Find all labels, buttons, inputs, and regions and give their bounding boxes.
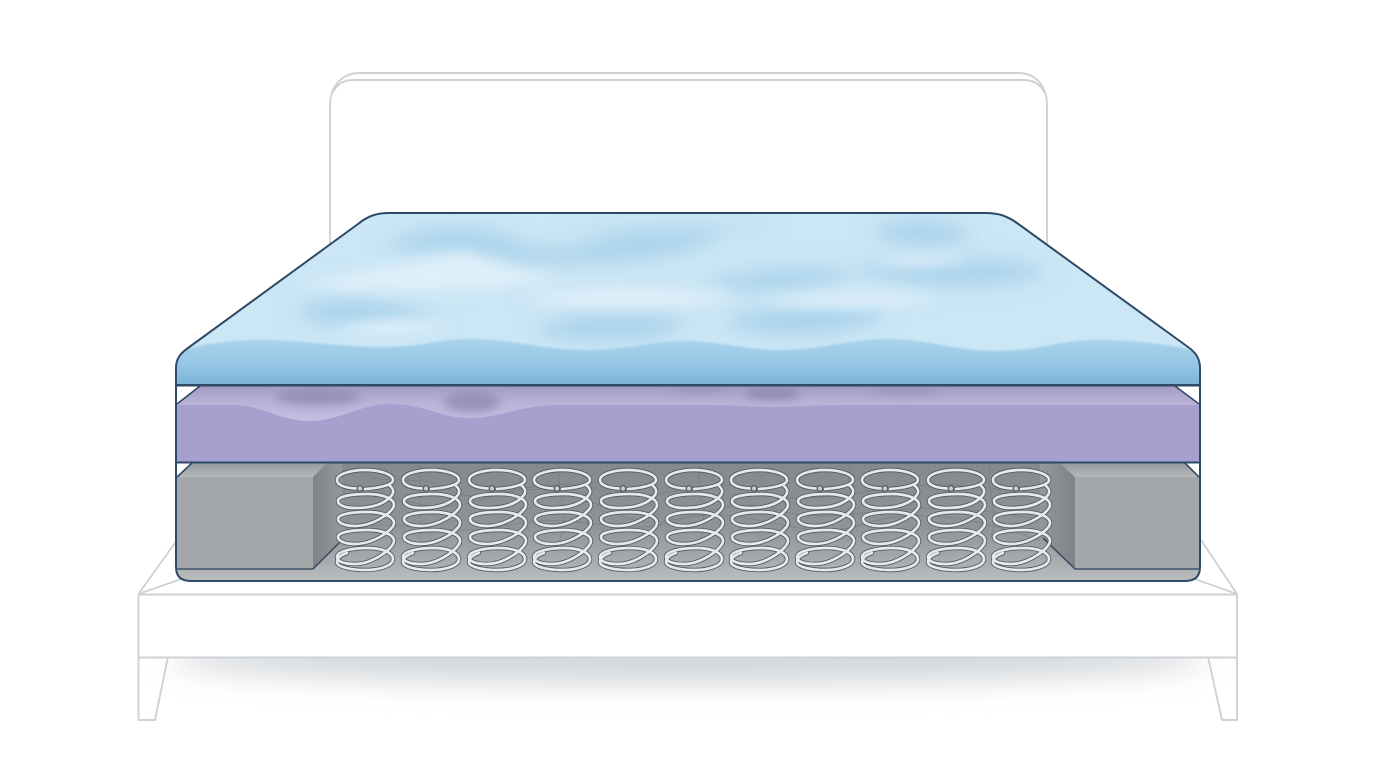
surface ripples: [290, 220, 1050, 341]
spring 6: [666, 470, 723, 570]
spring 1: [337, 470, 394, 570]
white gaps at back corners: [177, 463, 1199, 476]
spring 11: [993, 470, 1050, 570]
floor shadow under bed: [175, 658, 1201, 696]
layer: blue gel memory foam top: [170, 210, 1210, 390]
dent shadows: [276, 386, 939, 412]
headboard outline: [330, 73, 1047, 245]
spring 7: [731, 470, 788, 570]
front wave band: [176, 339, 1200, 386]
layer: grey coil support base: [177, 463, 1199, 580]
spring 9: [862, 470, 919, 570]
spring 2: [403, 470, 460, 570]
spring 5: [600, 470, 657, 570]
spring 10: [928, 470, 985, 570]
spring 8: [797, 470, 854, 570]
spring row: [337, 470, 1050, 570]
layer: purple comfort foam: [177, 386, 1199, 462]
left foam block: [177, 463, 342, 569]
faint wire texture behind springs: [340, 465, 1040, 540]
white gaps at back corners: [177, 386, 1199, 404]
illustration: layered mattress on bed frame: [138, 72, 1238, 721]
right foam block: [1040, 463, 1199, 569]
spring 4: [534, 470, 591, 570]
purple foam top face: [177, 386, 1199, 421]
spring 3: [469, 470, 526, 570]
bed frame base with legs: [138, 540, 1237, 720]
mattress outer outline and layer separators: [176, 385, 1200, 581]
